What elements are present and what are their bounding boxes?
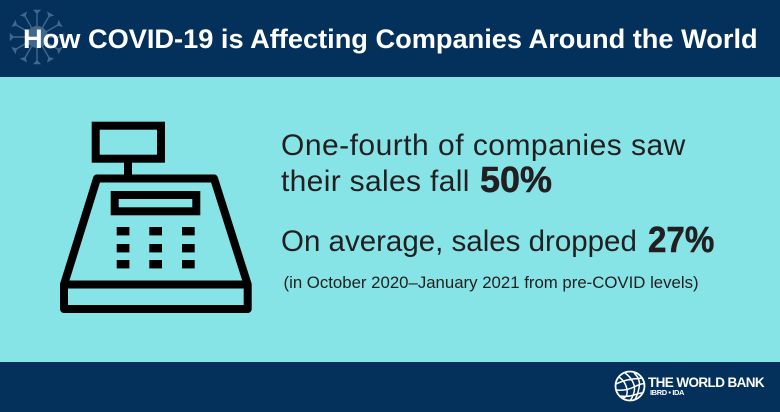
statement: one-fourth of companies: 50% bbox=[480, 158, 552, 200]
icon: cash register bbox=[60, 122, 252, 313]
statement: average sales drop: 27% bbox=[648, 218, 714, 260]
icon: World Bank globe bbox=[614, 370, 646, 402]
statement: average sales drop bbox=[281, 218, 714, 260]
note: time period: (in October 2020–January 2021 from pre-COVID levels) bbox=[284, 272, 699, 292]
footer band bbox=[0, 362, 780, 412]
icon: virus bbox=[10, 10, 64, 64]
statement: one-fourth of companies: One-fourth of companies saw bbox=[281, 129, 686, 162]
statement: one-fourth of companies: their sales fall bbox=[281, 165, 470, 198]
logo subtext: IBRD • IDA bbox=[650, 388, 684, 397]
header band bbox=[0, 0, 780, 77]
statement: average sales drop: On average, sales dropped bbox=[281, 225, 637, 258]
title: How COVID-19 is Affecting Companies Around the World bbox=[23, 23, 758, 54]
logo text: THE WORLD BANK bbox=[648, 375, 764, 390]
statement: one-fourth of companies bbox=[281, 129, 686, 200]
